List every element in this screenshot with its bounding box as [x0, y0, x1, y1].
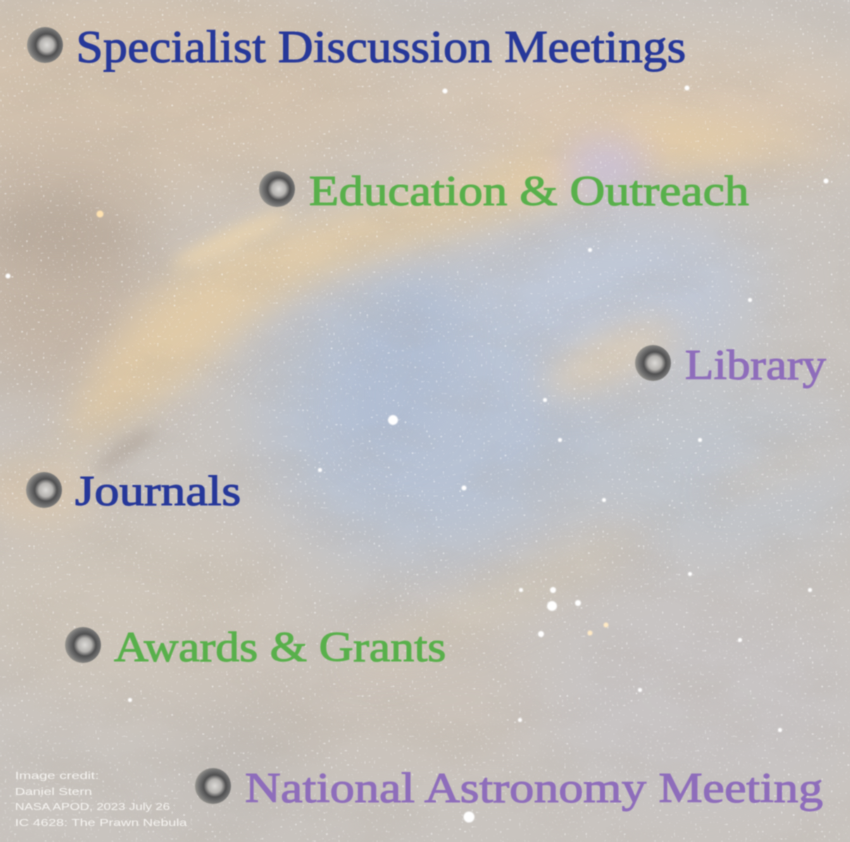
- item: Journals: [26, 469, 241, 515]
- icon: stud: [195, 768, 231, 804]
- item: Specialist Discussion Meetings: [27, 22, 686, 72]
- image credit: IC 4628: The Prawn Nebula: [15, 817, 187, 829]
- item: Library: [635, 343, 826, 389]
- label: Awards & Grants: [114, 625, 446, 671]
- label: Journals: [75, 469, 241, 515]
- label: Education & Outreach: [309, 169, 749, 215]
- image credit: Daniel Stern: [15, 786, 92, 798]
- item: Awards & Grants: [65, 625, 446, 671]
- icon: stud: [65, 627, 101, 663]
- icon: stud: [259, 171, 295, 207]
- label: Library: [685, 343, 826, 389]
- label: National Astronomy Meeting: [245, 766, 823, 812]
- label: Specialist Discussion Meetings: [76, 22, 686, 72]
- icon: stud: [26, 472, 62, 508]
- image credit: NASA APOD, 2023 July 26: [15, 801, 170, 813]
- item: Education & Outreach: [259, 169, 749, 215]
- item: National Astronomy Meeting: [195, 766, 823, 812]
- icon: stud: [635, 345, 671, 381]
- icon: stud: [27, 27, 63, 63]
- image credit: Image credit:: [15, 770, 99, 782]
- image credit: [15, 770, 187, 829]
